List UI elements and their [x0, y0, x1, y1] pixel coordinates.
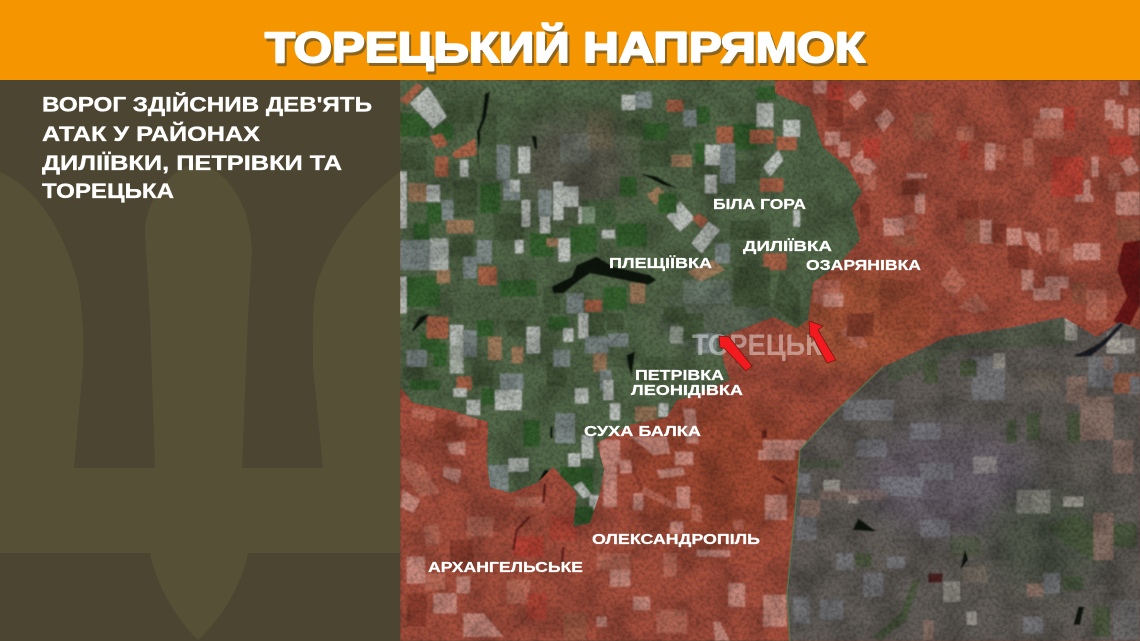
red occupied territory [400, 80, 1140, 641]
left panel [0, 80, 400, 641]
panel text: summary: АТАК У РАЙОНАХ [42, 122, 260, 146]
town labels: ОЛЕКСАНДРОПІЛЬ [592, 531, 760, 548]
town labels [428, 196, 921, 576]
town labels: ПЛЕЩІЇВКА [609, 255, 712, 272]
town labels: БІЛА ГОРА [713, 196, 806, 213]
trident watermark [0, 162, 400, 640]
Toretsk label: ТОРЕЦЬК [692, 329, 823, 362]
town labels: ПЕТРІВКА [635, 367, 724, 384]
panel text: summary [42, 92, 372, 203]
green base mosaic [400, 100, 760, 390]
town labels: ОЗАРЯНІВКА [806, 257, 921, 274]
title: ТОРЕЦЬКИЙ НАПРЯМОК [265, 23, 866, 72]
header bar [0, 0, 1140, 80]
front line edge [787, 367, 883, 641]
arrow: attack west [719, 336, 752, 371]
town labels: ДИЛІЇВКА [743, 238, 832, 255]
town labels: СУХА БАЛКА [584, 423, 701, 440]
red fields NE [813, 80, 1140, 348]
green Ukrainian-held territory [400, 80, 880, 530]
map panel [400, 80, 1140, 641]
title: ТОРЕЦЬКИЙ НАПРЯМОК [267, 26, 868, 75]
satellite texture overlays [400, 80, 1140, 641]
town labels: АРХАНГЕЛЬСЬКЕ [428, 559, 583, 576]
arrow: attack east [809, 321, 836, 363]
panel text: summary: ТОРЕЦЬКА [42, 180, 174, 203]
red fields SW [400, 407, 807, 641]
green fields south [453, 380, 668, 523]
strip near front [885, 318, 1072, 385]
panel text: summary: ДИЛІЇВКИ, ПЕТРІВКИ ТА [42, 152, 342, 175]
lake, dark red [1113, 240, 1140, 325]
gray right territory [780, 310, 1140, 641]
water bodies [552, 257, 657, 293]
panel text: summary: ВОРОГ ЗДІЙСНИВ ДЕВ'ЯТЬ [42, 92, 372, 116]
green fields north [400, 83, 800, 390]
town labels: ЛЕОНІДІВКА [631, 382, 743, 399]
